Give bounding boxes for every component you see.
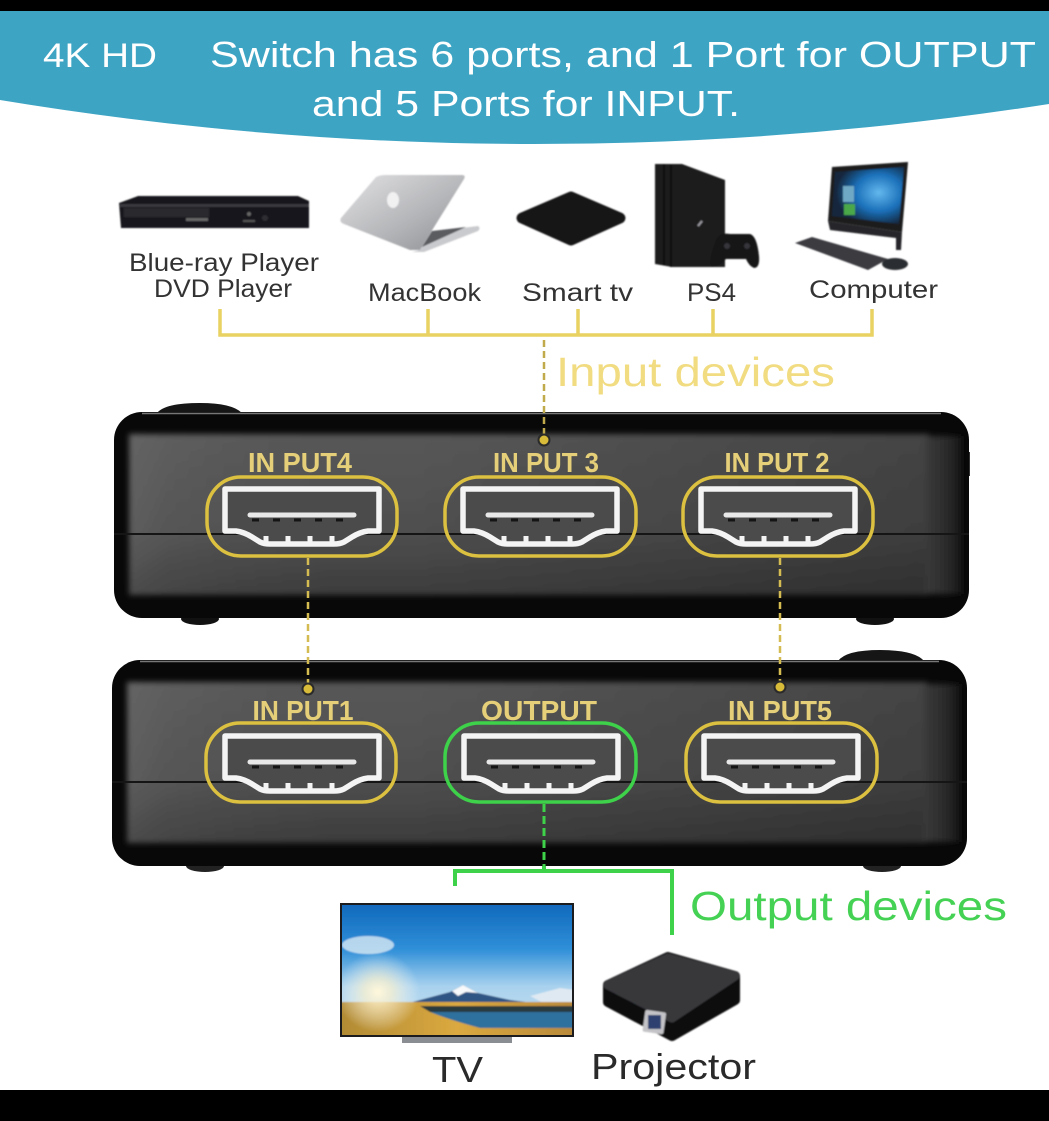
heading line 1: Switch has 6 ports, and 1 Port for OUTPUT: [210, 34, 1036, 75]
switch bottom panel: [112, 650, 967, 872]
heading: Output devices: Output devices: [690, 883, 1007, 929]
input devices row: [119, 162, 938, 307]
label: Computer: Computer: [809, 276, 938, 304]
port group: INPUT 4: IN PUT4: [248, 447, 352, 478]
connector dots: [302, 434, 786, 694]
dashed connector: input 2 to input 5: [779, 558, 781, 683]
port group: INPUT 2: [683, 447, 873, 556]
input bracket connector: [220, 309, 872, 335]
port group: OUTPUT: OUTPUT: [481, 695, 597, 726]
port group: INPUT 4: [207, 447, 397, 556]
icon: Computer: [795, 162, 908, 270]
label: DVD Player: DVD Player: [154, 275, 292, 303]
icon: Smart TV box: [522, 197, 620, 240]
icon: Blu-ray player: [119, 196, 309, 228]
top black bar: [0, 0, 1049, 11]
port group: INPUT 1: [206, 695, 396, 802]
output bracket connector: [455, 866, 672, 935]
icon: TV: [336, 901, 576, 1043]
port group: INPUT 1: IN PUT1: [252, 695, 354, 726]
device labels: [129, 249, 938, 307]
header banner: [0, 11, 1049, 144]
port group: INPUT 5: IN PUT5: [728, 695, 832, 726]
dashed connector: output: [542, 804, 546, 866]
icon: PS4: [655, 164, 759, 268]
label: Smart tv: Smart tv: [522, 279, 634, 307]
dashed connector: input 4 to input 1: [307, 558, 309, 683]
switch top panel: [114, 403, 970, 625]
heading line 2: and 5 Ports for INPUT.: [312, 83, 740, 124]
dashed connector: input devices to input 3: [543, 340, 545, 434]
port group: INPUT 3: [445, 447, 636, 556]
port group: OUTPUT: [445, 695, 636, 802]
icon: Projector: [608, 957, 735, 1036]
port group: INPUT 5: [686, 695, 877, 802]
icon: MacBook: [340, 175, 480, 252]
label: Blue-ray Player: Blue-ray Player: [129, 249, 319, 277]
label: MacBook: MacBook: [368, 279, 482, 307]
port group: INPUT 2: IN PUT 2: [724, 447, 830, 478]
heading label: 4K HD: 4K HD: [43, 37, 157, 75]
label: PS4: PS4: [687, 279, 736, 307]
label: Projector: Projector: [591, 1046, 756, 1087]
label: TV: TV: [432, 1049, 483, 1090]
heading: Input devices: Input devices: [556, 349, 835, 395]
port group: INPUT 3: IN PUT 3: [493, 447, 599, 478]
bottom black bar: [0, 1090, 1049, 1121]
